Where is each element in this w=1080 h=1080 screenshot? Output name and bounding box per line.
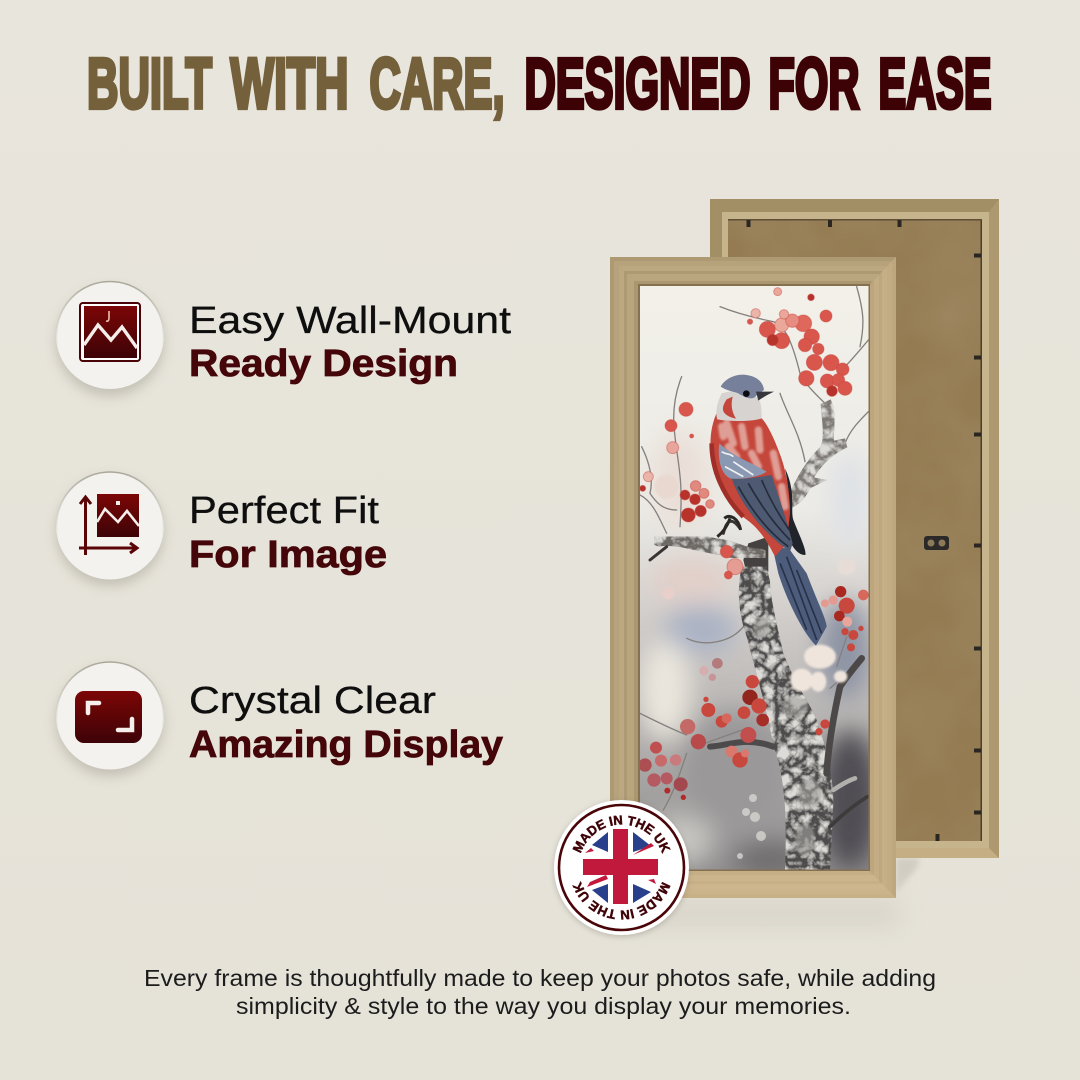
icon: image with dimension arrows (79, 494, 139, 555)
berries (640, 288, 852, 579)
face (716, 391, 762, 421)
footer text (144, 965, 936, 1019)
watercolour wash (639, 430, 880, 878)
dark rear feather (785, 468, 806, 555)
title: CARE, (370, 45, 504, 124)
title (87, 45, 992, 124)
wing (732, 475, 793, 552)
title: FOR (768, 45, 860, 124)
text: easy wall-mount: Ready Design (189, 343, 458, 385)
feature: perfect fit (56, 472, 387, 586)
thin twigs (640, 287, 868, 810)
text: easy wall-mount: Easy Wall-Mount (189, 300, 511, 342)
curved badge text: MADE IN THE UK (572, 815, 671, 854)
framed painting: bird on berry branch (638, 286, 880, 878)
red body (710, 410, 790, 557)
icon: framed mountain with hook (80, 303, 140, 361)
title: EASE (878, 45, 992, 124)
horizontal perch (650, 521, 760, 560)
text: crystal clear: Amazing Display (189, 724, 503, 766)
head (721, 375, 764, 398)
retaining tabs (746, 220, 981, 841)
union flag (583, 829, 658, 904)
text: perfect fit: For Image (189, 534, 387, 576)
tail (772, 543, 827, 646)
front frame (610, 257, 896, 898)
frame shadows (625, 858, 920, 928)
pale droplets (737, 794, 766, 859)
icon: screen with corner brackets (75, 691, 142, 743)
footer text: Every frame is thoughtfully made to keep your photos safe, while adding (144, 965, 936, 991)
feature: easy wall-mount (56, 281, 511, 396)
curved badge text (572, 815, 671, 920)
feature: crystal clear (56, 662, 503, 776)
footer text: simplicity & style to the way you display your memories. (236, 993, 851, 1019)
text: perfect fit (189, 490, 387, 576)
title: WITH (230, 45, 348, 124)
title: DESIGNED (524, 45, 750, 124)
side limbs (710, 658, 867, 827)
badge: made in the UK (552, 800, 690, 939)
title: BUILT (87, 45, 212, 124)
back of frame (710, 199, 999, 858)
feet (717, 516, 741, 537)
hanging clip (924, 536, 949, 550)
main trunk (739, 567, 833, 870)
blossoms (655, 475, 856, 692)
backing board (728, 219, 982, 841)
text: crystal clear: Crystal Clear (189, 680, 436, 722)
bird (710, 375, 827, 646)
text: crystal clear (189, 680, 503, 766)
text: perfect fit: Perfect Fit (189, 490, 379, 532)
upper branch (743, 399, 847, 573)
curved badge text: MADE IN THE UK (572, 881, 671, 920)
text: easy wall-mount (189, 300, 511, 385)
